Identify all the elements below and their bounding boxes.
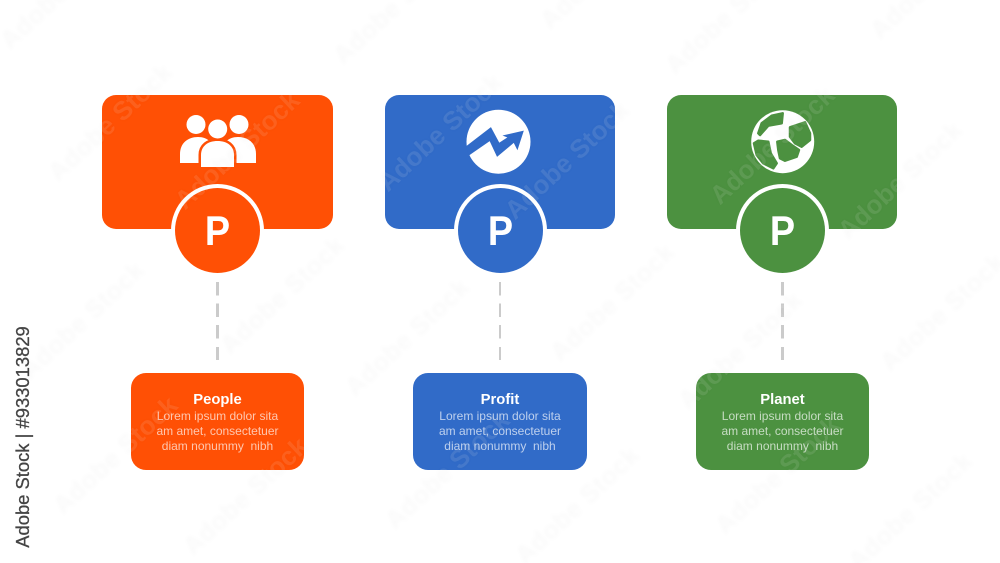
watermark: Adobe Stock: [214, 230, 350, 360]
watermark: Adobe Stock: [169, 85, 305, 215]
watermark: Adobe Stock: [499, 95, 635, 225]
connector: profit: [498, 282, 501, 360]
badge: planet P: P: [770, 207, 795, 254]
icon: globe: [751, 110, 814, 174]
watermark: Adobe Stock: [42, 57, 178, 187]
badge: planet P: [736, 184, 829, 277]
badge: profit P: P: [487, 207, 513, 254]
watermark: Adobe Stock: [672, 285, 808, 415]
text box: profit: am amet, consectetuer: [439, 424, 561, 438]
badge: people P: P: [205, 207, 230, 254]
text box: people: People: [193, 392, 242, 408]
watermark: Adobe Stock: [14, 255, 150, 385]
watermark: Adobe Stock: [372, 67, 508, 197]
icon: growth arrow in circle: [466, 110, 530, 174]
panel: people card: [102, 95, 333, 229]
panel: profit card: [385, 95, 615, 229]
text box: people: Lorem ipsum dolor sita: [157, 409, 278, 423]
connector: people: [216, 282, 218, 360]
text box: planet: diam nonummy nibh: [727, 439, 838, 453]
watermark: Adobe Stock: [47, 390, 183, 520]
stock id label: Adobe Stock | #933013829: [12, 326, 33, 548]
watermark: Adobe Stock: [832, 115, 968, 245]
text box: planet: [696, 373, 869, 470]
text box: people: am amet, consectetuer: [156, 424, 279, 438]
watermark: Adobe Stock: [177, 431, 313, 561]
text box: profit: [413, 373, 587, 470]
watermark: Adobe Stock: [704, 80, 840, 210]
text box: profit: diam nonummy nibh: [444, 439, 556, 453]
watermark: Adobe Stock: [544, 237, 680, 367]
text box: planet: Lorem ipsum dolor sita: [722, 409, 843, 423]
watermark: Adobe Stock: [709, 410, 845, 540]
badge: people P: [171, 184, 264, 277]
badge: profit P: [454, 184, 546, 277]
text box: planet: Planet: [760, 392, 805, 408]
watermark: Adobe Stock: [339, 272, 475, 402]
text box: people: [131, 373, 304, 470]
connector: planet: [781, 282, 784, 360]
text box: planet: am amet, consectetuer: [721, 424, 844, 438]
icon: group of people: [180, 115, 256, 167]
text box: profit: Profit: [481, 392, 519, 408]
text box: profit: Lorem ipsum dolor sita: [439, 409, 561, 423]
text box: people: diam nonummy nibh: [162, 439, 273, 453]
panel: planet card: [667, 95, 897, 229]
watermark: Adobe Stock: [379, 405, 515, 535]
